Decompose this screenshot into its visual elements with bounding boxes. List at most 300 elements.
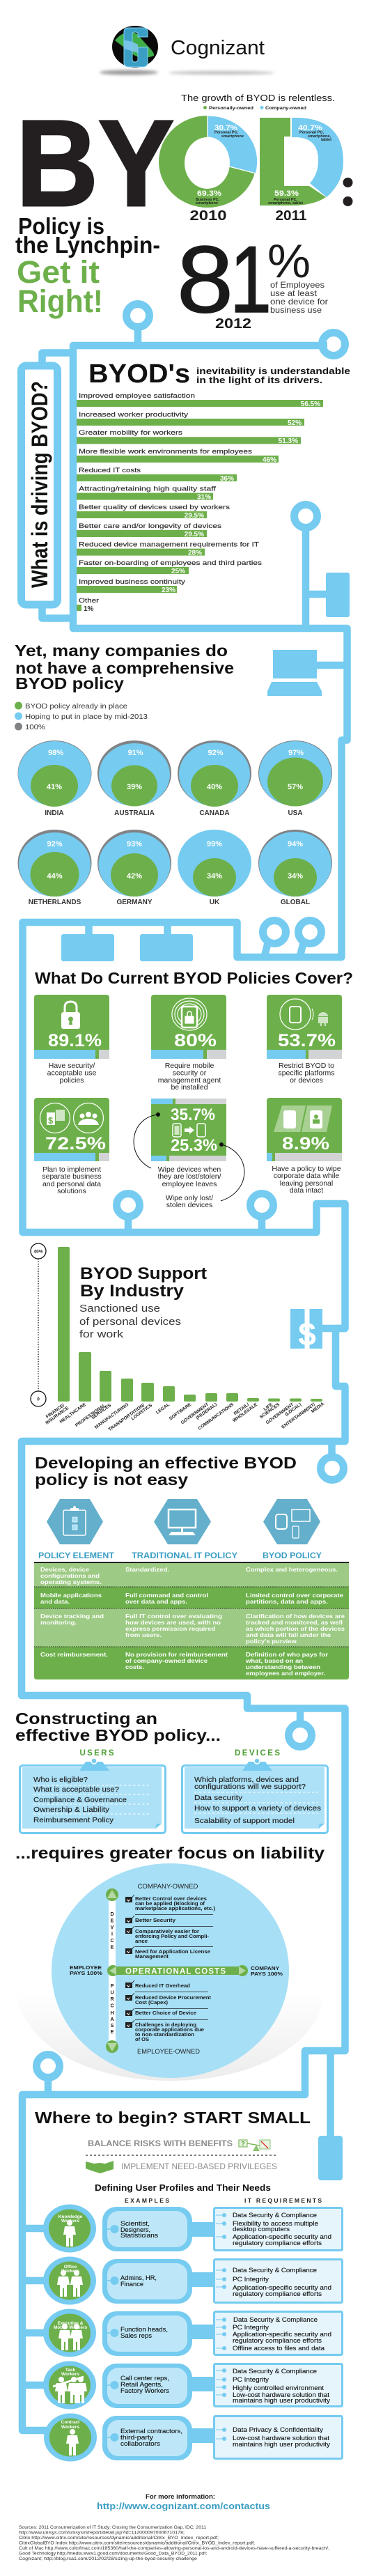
card: 80 percent agent: security or <box>173 1069 207 1077</box>
title: BYOD <box>16 95 352 232</box>
profile row: contract workers: External contractors, <box>120 2428 182 2435</box>
diagram: liability quadrant circle: R <box>110 1997 114 2002</box>
title: BYOD: BY <box>16 95 174 232</box>
Germany: 93% <box>127 840 142 848</box>
bar chart: BYOD drivers: 31% <box>197 493 211 502</box>
Global: 34% <box>288 872 303 880</box>
checklist: company-owned items: ance <box>135 1938 148 1944</box>
table row: reimbursement <box>40 1651 329 1677</box>
diagram: liability quadrant circle: U <box>110 1991 114 1995</box>
Germany: GERMANY <box>116 899 153 906</box>
card: 8.9 percent selective wipe <box>267 1098 342 1195</box>
footer: sources <box>19 2526 329 2561</box>
table row: tracking: policy's purview. <box>246 1638 298 1645</box>
card: 8.9 percent selective wipe: data intact <box>290 1186 323 1195</box>
bar chart: BYOD drivers: Other <box>79 597 99 605</box>
checklist: employee-owned items: corporate applications due <box>135 2026 204 2033</box>
icon: dollar block <box>290 1309 322 1352</box>
profile row: executive and mobile workers: Data Security & Compliance <box>233 2316 318 2323</box>
profile row: executive and mobile workers: Application-specific security and <box>233 2331 331 2338</box>
Canada: 92% <box>208 749 224 757</box>
footer: more information link <box>97 2493 270 2511</box>
donut chart: 2011 letter D: Personal PC, <box>299 131 325 135</box>
bar chart: BYOD drivers: More flexible work environments for employees <box>79 448 252 456</box>
profile row: contract workers: collaborators <box>120 2440 160 2448</box>
Australia: 39% <box>127 783 142 791</box>
axis labels: industries: WHOLESALE <box>232 1402 259 1423</box>
axis labels: industries: ENTERTAINMENT/ <box>281 1402 316 1430</box>
footer: sources: CitrixGlobalBYO Index http://www.citrix.com/site/resources/dynamic/additional/Citrix_BYOD_Index_report.pdf; <box>19 2541 255 2545</box>
bar chart: BYOD drivers: Faster on-boarding of employees and third parties <box>79 559 262 567</box>
bar chart: BYOD drivers: 28% <box>188 549 202 557</box>
axis labels: industries: FINANCE/ <box>45 1403 65 1420</box>
profile row: task workers: Highly controlled environment <box>233 2384 325 2391</box>
Germany: 42% <box>127 872 142 880</box>
table row: tracking <box>40 1613 345 1645</box>
UK: 99% <box>207 840 222 848</box>
axis labels: industries: MEDIA <box>311 1402 325 1414</box>
arrow: curved callouts <box>134 1113 244 1201</box>
table row: devices: Complex and heterogeneous. <box>246 1566 338 1573</box>
table row: reimbursement: Definition of who pays for <box>246 1651 329 1658</box>
card: 53.7 percent restrict: Restrict BYOD to <box>279 1062 334 1070</box>
card: wipe devices: employee leaves <box>162 1180 217 1188</box>
diagram: liability quadrant circle: P <box>111 1984 114 1989</box>
footer: more information link: For more information: <box>146 2493 215 2500</box>
card: 53.7 percent restrict: specific platforms <box>278 1069 335 1077</box>
subtitle: policy is the lynchpin: Right! <box>17 284 103 319</box>
profile row: office workers <box>43 2257 343 2304</box>
UK: 34% <box>207 872 222 880</box>
Netherlands <box>18 830 92 906</box>
donut chart: 2011 letter D: Personal PC, <box>274 198 298 202</box>
panel: devices clipboard <box>182 1749 327 1833</box>
axis labels: industries: GOVERNMENT <box>180 1402 210 1425</box>
table row: reimbursement: costs. <box>125 1663 144 1670</box>
heading: BYOD support by industry: BYOD Support <box>80 1264 207 1283</box>
card: 8.9 percent selective wipe: leaving personal <box>280 1179 333 1188</box>
logo: Cognizant <box>100 26 274 75</box>
card: wipe devices: 25.3% <box>171 1136 217 1155</box>
profile row: knowledge workers: regulatory compliance efforts <box>233 2240 322 2247</box>
profile row: knowledge workers: Knowledge <box>58 2214 83 2219</box>
axis labels: industries: LOGISTICS <box>130 1403 154 1422</box>
USA: USA <box>288 809 303 817</box>
donut chart: 2010 letter O: smartphone <box>221 134 244 139</box>
profile row: task workers: Call center reps, <box>120 2375 169 2382</box>
India: INDIA <box>45 809 64 817</box>
heading: developing an effective policy: policy is not easy <box>35 1471 188 1489</box>
panel: users clipboard: Compliance & Governance <box>33 1796 127 1804</box>
heading: BYOD's inevitability: in the light of its drivers. <box>196 375 322 385</box>
UK <box>178 830 251 906</box>
card: wipe devices: Wipe only lost/ <box>166 1194 213 1202</box>
profile row: task workers: Low-cost hardware solution that <box>233 2391 330 2398</box>
bar chart: BYOD drivers: Reduced IT costs <box>79 467 141 474</box>
diagram: liability quadrant circle: COMPANY-OWNED <box>138 1883 198 1891</box>
Global: 94% <box>288 840 303 848</box>
profile row: task workers: Factory Workers <box>120 2387 169 2395</box>
bar chart: support by industry <box>31 1243 325 1432</box>
table: policy comparison <box>34 1562 349 1679</box>
icons: table column hexagons: POLICY ELEMENT <box>38 1552 114 1560</box>
chart: country circles row 2 <box>18 830 332 906</box>
profile row: executive and mobile workers: PC Integrity <box>233 2324 269 2331</box>
chart intro: growth of BYOD: Company-owned <box>265 106 306 111</box>
Netherlands: 92% <box>47 840 63 848</box>
profile row: executive and mobile workers: regulatory compliance efforts <box>233 2337 322 2344</box>
profile row: knowledge workers: Flexibility to access multiple <box>233 2220 318 2227</box>
card: 80 percent agent: management agent <box>158 1076 221 1085</box>
card: 8.9 percent selective wipe: Have a policy to wipe <box>272 1165 341 1173</box>
profile row: contract workers: Contract <box>61 2420 80 2425</box>
donut chart: 2010 letter O: 30.7% <box>214 124 237 132</box>
profile row: contract workers <box>44 2413 343 2462</box>
stat: 81 percent: business use <box>270 305 322 315</box>
donut chart: 2011 letter D: tablet <box>321 138 331 142</box>
panel: devices clipboard: configurations will we support? <box>194 1783 306 1791</box>
card: 80 percent agent <box>151 995 226 1092</box>
donut chart: 2011 letter D: 40.7% <box>298 124 322 132</box>
subtitle: policy is the lynchpin <box>15 213 160 319</box>
heading: what do current policies cover: What Do Current BYOD Policies Cover? <box>35 969 353 987</box>
donut chart: 2010 letter O: 2010 <box>189 208 227 224</box>
profile row: office workers: regulatory compliance efforts <box>233 2290 322 2297</box>
India: 41% <box>47 783 62 791</box>
profile row: knowledge workers: Workers <box>61 2219 79 2224</box>
card: 89.1 percent security: policies <box>59 1076 84 1085</box>
USA: 97% <box>288 749 304 757</box>
card: 89.1 percent security: 89.1% <box>48 1031 102 1050</box>
bar chart: BYOD drivers: Reduced device management requirements for IT <box>79 541 259 549</box>
card: wipe devices: they are lost/stolen/ <box>157 1172 221 1181</box>
card: 53.7 percent restrict: or devices <box>290 1076 323 1085</box>
stat: 81 percent: use at least <box>270 288 318 298</box>
card: 80 percent agent: 80% <box>174 1031 217 1050</box>
diagram: liability quadrant circle: A <box>110 2017 114 2022</box>
profile row: knowledge workers: Data Security & Compliance <box>233 2212 317 2219</box>
profile row: executive and mobile workers: Function heads, <box>120 2326 168 2334</box>
donut chart: 2010 letter O: Personal PC, <box>214 131 239 135</box>
table row: mobile applications <box>40 1592 343 1605</box>
UK: UK <box>210 899 220 906</box>
card: 89.1 percent security: Have security/ <box>49 1062 95 1070</box>
card: 72.5 percent separate solutions <box>34 1098 109 1195</box>
chart: country circles row 1 <box>18 740 332 817</box>
table row: reimbursement: employees and employer. <box>246 1670 325 1677</box>
profile row: task workers: Task <box>65 2368 76 2373</box>
table row: tracking: Clarification of how devices are <box>246 1613 345 1620</box>
panel: devices clipboard: Which platforms, devices and <box>194 1776 299 1784</box>
profile row: contract workers: maintains high user productivity <box>233 2441 331 2448</box>
card: wipe devices <box>134 1099 244 1209</box>
Canada: CANADA <box>199 809 230 817</box>
checklist: company-owned items: Comparatively easier for <box>135 1928 199 1934</box>
panel: users clipboard: USERS <box>79 1749 114 1758</box>
heading: constructing an effective policy: effective BYOD policy... <box>15 1726 221 1744</box>
axis labels: industries <box>45 1402 325 1432</box>
bar chart: BYOD drivers: Improved employee satisfaction <box>79 392 195 400</box>
footer: more information link: http://www.cognizant.com/contactus <box>97 2501 270 2511</box>
icon: desktop hexagon <box>154 1499 211 1544</box>
Canada: 40% <box>207 783 222 791</box>
card: 89.1 percent security: acceptable use <box>47 1069 96 1077</box>
icon: contract worker <box>66 2429 79 2455</box>
subtitle: policy is the lynchpin: Policy is <box>18 213 104 239</box>
diagram: liability quadrant circle: I <box>111 1932 113 1937</box>
table row: mobile applications: and data. <box>40 1598 70 1605</box>
text: balance risks: IT REQUIREMENTS <box>244 2197 322 2204</box>
heading: BYOD's inevitability <box>88 359 350 389</box>
axis labels: industries: LIFE <box>263 1402 274 1412</box>
heading: yet many companies: BYOD policy <box>15 674 124 692</box>
table row: mobile applications: Mobile applications <box>40 1592 102 1599</box>
diagram: liability quadrant circle: PAYS 100% <box>251 1971 283 1977</box>
diagram: liability quadrant circle: E <box>111 1945 114 1950</box>
profile row: knowledge workers: Designers, <box>120 2226 150 2234</box>
Australia <box>97 740 171 817</box>
profile row: knowledge workers: Application-specific security and <box>233 2233 331 2240</box>
checklist: company-owned items: Management <box>135 1953 169 1960</box>
panel: users clipboard <box>19 1749 166 1833</box>
profile row: knowledge workers <box>43 2204 343 2253</box>
card: wipe devices: stolen devices <box>166 1201 212 1209</box>
icons: table column hexagons: BYOD POLICY <box>263 1552 322 1560</box>
table row: tracking: how devices are used, with no <box>125 1619 221 1626</box>
profile row: task workers: Retail Agents, <box>120 2381 163 2389</box>
bar chart: BYOD drivers: Better care and/or longevity of devices <box>79 522 221 530</box>
text: balance risks: BALANCE RISKS WITH BENEFITS <box>88 2139 233 2148</box>
diagram: liability quadrant circle: V <box>111 1925 114 1930</box>
shadow ellipse <box>16 1992 326 2081</box>
icon: dollar block: $ <box>298 1316 316 1352</box>
bar chart: BYOD drivers: 29.5% <box>185 512 204 520</box>
axis labels: industries: (FEDERAL) <box>195 1402 218 1421</box>
table row: devices <box>40 1566 338 1585</box>
checklist: company-owned items: Better Security <box>135 1917 176 1923</box>
table row: reimbursement: of company-owned device <box>125 1657 208 1664</box>
profile row: task workers: Data Security & Compliance <box>233 2368 317 2375</box>
axis labels: industries: PROFESSIONAL <box>75 1403 107 1428</box>
card: 53.7 percent restrict <box>267 995 342 1085</box>
table row: devices: Devices, device <box>40 1566 89 1573</box>
operational costs bar: OPERATIONAL COSTS <box>125 1967 226 1976</box>
card: wipe devices: 35.7% <box>171 1105 215 1124</box>
heading: developing an effective policy: Developing an effective BYOD <box>35 1454 297 1472</box>
table row: tracking: as which portion of the devices <box>246 1625 345 1632</box>
footer: sources: Sources: 2011 Consumerization of IT Study: Closing the Consumerization Gap, IDC, 2011 <box>19 2526 207 2530</box>
profile row: knowledge workers: desktop computers <box>233 2226 290 2233</box>
profile row: office workers: Application-specific security and <box>233 2284 331 2291</box>
Netherlands: NETHERLANDS <box>29 899 81 906</box>
checklist: employee-owned items: Reduced Device Procurement <box>135 1994 212 2001</box>
icon: devices hexagon <box>263 1499 320 1544</box>
checklist: company-owned items <box>125 1895 216 1960</box>
checklist: employee-owned items: Reduced IT Overhead <box>135 1983 190 1989</box>
table row: tracking: from users. <box>125 1631 162 1638</box>
heading: constructing an effective policy <box>15 1709 221 1744</box>
diagram: liability quadrant circle <box>16 1863 326 2081</box>
table row: tracking: and data will fall under the <box>246 1631 331 1638</box>
bar chart: BYOD drivers: Greater mobility for workers <box>79 429 182 437</box>
table row: mobile applications: over data and apps. <box>125 1598 187 1605</box>
footer: sources: Citrix http://www.citrix.com/site/resources/dynamic/additional/Citrix_BYO_Index_report.pdf; <box>19 2536 219 2540</box>
text: balance risks: Defining User Profiles and Their Needs <box>95 2183 271 2193</box>
axis labels: industries: (LOCAL) <box>284 1402 302 1418</box>
axis: 0 to 40 percent: 0 <box>37 1397 40 1402</box>
panel: devices clipboard: Data security <box>194 1794 243 1802</box>
donut chart: 2011 letter D: smartphone, <box>308 134 331 139</box>
donut chart: 2010 letter O: Business PC, <box>196 198 220 202</box>
table row: reimbursement: Cost reimbursement. <box>40 1651 108 1658</box>
card: 89.1 percent security <box>34 995 109 1085</box>
profile row: office workers: Admins, HR, <box>120 2274 157 2282</box>
card: 8.9 percent selective wipe: corporate data while <box>274 1172 339 1180</box>
diagram: liability quadrant circle: EMPLOYEE-OWNED <box>137 2048 200 2056</box>
Netherlands: 44% <box>47 872 63 880</box>
card: wipe devices: Wipe devices when <box>158 1165 221 1174</box>
checklist: employee-owned items: to non-standardization <box>135 2031 194 2038</box>
icon: phone wipe arrow <box>173 1124 205 1137</box>
panel: devices clipboard: How to support a variety of devices <box>194 1804 321 1813</box>
bar chart: BYOD drivers <box>77 392 323 613</box>
panel: devices clipboard: DEVICES <box>235 1749 280 1758</box>
icon: phone and android <box>280 999 328 1030</box>
icon: balance scale <box>239 2140 270 2151</box>
profile row: task workers: PC Integrity <box>233 2376 269 2383</box>
text: balance risks: EXAMPLES <box>125 2197 169 2204</box>
legend: policy circles: BYOD policy already in place <box>25 703 127 711</box>
legend: policy circles <box>15 702 148 731</box>
bar chart: BYOD drivers: Better quality of devices used by workers <box>79 504 230 511</box>
table row: tracking: monitoring. <box>40 1619 77 1626</box>
panel: users clipboard: Who is eligible? <box>33 1776 88 1784</box>
icon: clipboard hexagon <box>47 1499 103 1544</box>
card: 80 percent agent: Require mobile <box>165 1062 214 1070</box>
legend: policy circles: Hoping to put in place by mid-2013 <box>25 713 148 721</box>
icon: padlock <box>61 1002 80 1029</box>
heading: yet many companies: not have a comprehensive <box>15 659 234 677</box>
stat: 81 percent: 8 <box>177 226 233 332</box>
stat: 81 percent <box>177 226 328 332</box>
text: balance risks <box>86 2139 322 2204</box>
heading: BYOD support by industry: of personal devices <box>79 1316 181 1328</box>
checklist: employee-owned items: Better Choice of Device <box>135 2010 196 2016</box>
table row: reimbursement: No provision for reimbursement <box>125 1651 228 1658</box>
checklist: employee-owned items: of OS <box>135 2036 149 2042</box>
checklist: company-owned items: enforcing Policy and Compli- <box>135 1933 210 1939</box>
chart intro: growth of BYOD: Personally-owned <box>209 106 253 111</box>
Germany <box>97 830 171 906</box>
diagram: liability quadrant circle: E <box>111 1918 114 1924</box>
heading: BYOD's inevitability: inevitability is understandable <box>196 366 350 376</box>
icon: two executives <box>58 2324 83 2350</box>
checklist: company-owned items: can be applied (Blocking of <box>135 1900 205 1907</box>
card: 72.5 percent separate solutions: Plan to implement <box>42 1165 101 1174</box>
stat: 81 percent: 2012 <box>215 316 251 332</box>
checklist: company-owned items: marketplace applications, etc.) <box>135 1905 216 1911</box>
table row: tracking: Device tracking and <box>40 1613 104 1620</box>
chart intro: growth of BYOD: The growth of BYOD is relentless. <box>181 93 335 103</box>
axis labels: industries: INSURANCE <box>45 1406 70 1426</box>
ring nodes on pipe <box>36 304 345 2077</box>
bar chart: BYOD drivers: 52% <box>288 419 302 427</box>
USA <box>258 740 332 817</box>
icon: balance scale: ? <box>241 2140 245 2147</box>
icon: partitioned phones <box>274 1105 332 1132</box>
icon: handshake <box>86 2161 114 2173</box>
table row: mobile applications: Full command and control <box>125 1592 208 1599</box>
card: 53.7 percent restrict: 53.7% <box>278 1031 336 1050</box>
axis: 0 to 40 percent: 40% <box>33 1250 43 1254</box>
donut chart: 2011 letter D: 2011 <box>276 208 306 224</box>
axis labels: industries: SOFTWARE <box>169 1402 193 1422</box>
diagram: liability quadrant circle: S <box>111 2024 114 2028</box>
heading: yet many companies <box>15 642 234 692</box>
checklist: company-owned items: Better Control over devices <box>135 1895 207 1902</box>
Global <box>258 830 332 906</box>
donut chart: 2010 letter O: 69.3% <box>197 189 221 198</box>
heading: BYOD support by industry: By Industry <box>80 1282 185 1301</box>
axis labels: industries: TRANSPORTATION/ <box>108 1403 146 1432</box>
pipe end blocks and monitor shape <box>61 573 350 2180</box>
diagram: liability quadrant circle: C <box>110 2003 114 2009</box>
profile row: executive and mobile workers: Offline access to files and data <box>233 2345 325 2352</box>
checklist: employee-owned items: Cost (Capex) <box>135 1999 169 2005</box>
table row: reimbursement: what, based on an <box>245 1657 303 1664</box>
donut chart: 2010 letter O: smartphone <box>196 201 218 205</box>
profile row: contract workers: Low-cost hardware solution that <box>233 2435 330 2442</box>
checklist: employee-owned items: Challenges in deploying <box>135 2022 196 2028</box>
Australia: AUSTRALIA <box>114 809 155 817</box>
footer: sources: Cult of Mac http://www.cultofmac.com/185360/half-the-companies-allowing-personal-ios-and-android-devices-have-suffered-a-security-breach/; <box>19 2547 329 2551</box>
bar chart: BYOD drivers: Improved business continuity <box>79 578 185 586</box>
stat: 81 percent: 1 <box>230 226 272 332</box>
profile row: task workers: Workers <box>61 2372 79 2377</box>
Global: GLOBAL <box>281 899 310 906</box>
checklist: company-owned items: Need for Application License <box>135 1948 210 1955</box>
profile row: executive and mobile workers: Executive & <box>58 2321 84 2326</box>
heading: BYOD support by industry: for work <box>79 1328 124 1340</box>
axis labels: industries: SCIENCES <box>259 1402 281 1420</box>
bar chart: BYOD drivers: 51.3% <box>279 437 298 445</box>
bar chart: BYOD drivers: Increased worker productivity <box>79 411 188 419</box>
profile row: executive and mobile workers: Mobile Workers <box>54 2325 88 2330</box>
panel: users clipboard: Reimbursement Policy <box>33 1816 114 1824</box>
stat: 81 percent: % <box>267 235 311 288</box>
table row: reimbursement: understanding between <box>246 1663 320 1670</box>
USA: 57% <box>288 783 303 791</box>
table row: devices: Standardized. <box>125 1566 169 1573</box>
bar chart: BYOD drivers: 46% <box>263 456 276 464</box>
profile row: knowledge workers: Statisticians <box>120 2232 158 2240</box>
stat: 81 percent: one device for <box>270 297 328 307</box>
card: 72.5 percent separate solutions: 72.5% <box>45 1134 106 1154</box>
diagram: liability quadrant circle: C <box>110 1939 114 1943</box>
card: 8.9 percent selective wipe: 8.9% <box>282 1134 329 1154</box>
subtitle: policy is the lynchpin: Get it <box>17 254 100 290</box>
card: 72.5 percent separate solutions: and personal data <box>42 1180 101 1188</box>
heading: constructing an effective policy: Constructing an <box>15 1709 157 1728</box>
diagram: liability quadrant circle: EMPLOYEE <box>70 1964 102 1971</box>
icon: secure phone <box>172 998 207 1030</box>
donut chart: 2011 letter D: smartphone, tablet <box>268 201 303 205</box>
bar chart: BYOD drivers: Attracting/retaining high quality staff <box>79 485 216 493</box>
heading: yet many companies: Yet, many companies do <box>15 642 228 660</box>
diagram: liability quadrant circle: E <box>111 2030 114 2035</box>
diagram: liability quadrant circle: D <box>110 1912 114 1917</box>
Canada <box>178 740 251 817</box>
